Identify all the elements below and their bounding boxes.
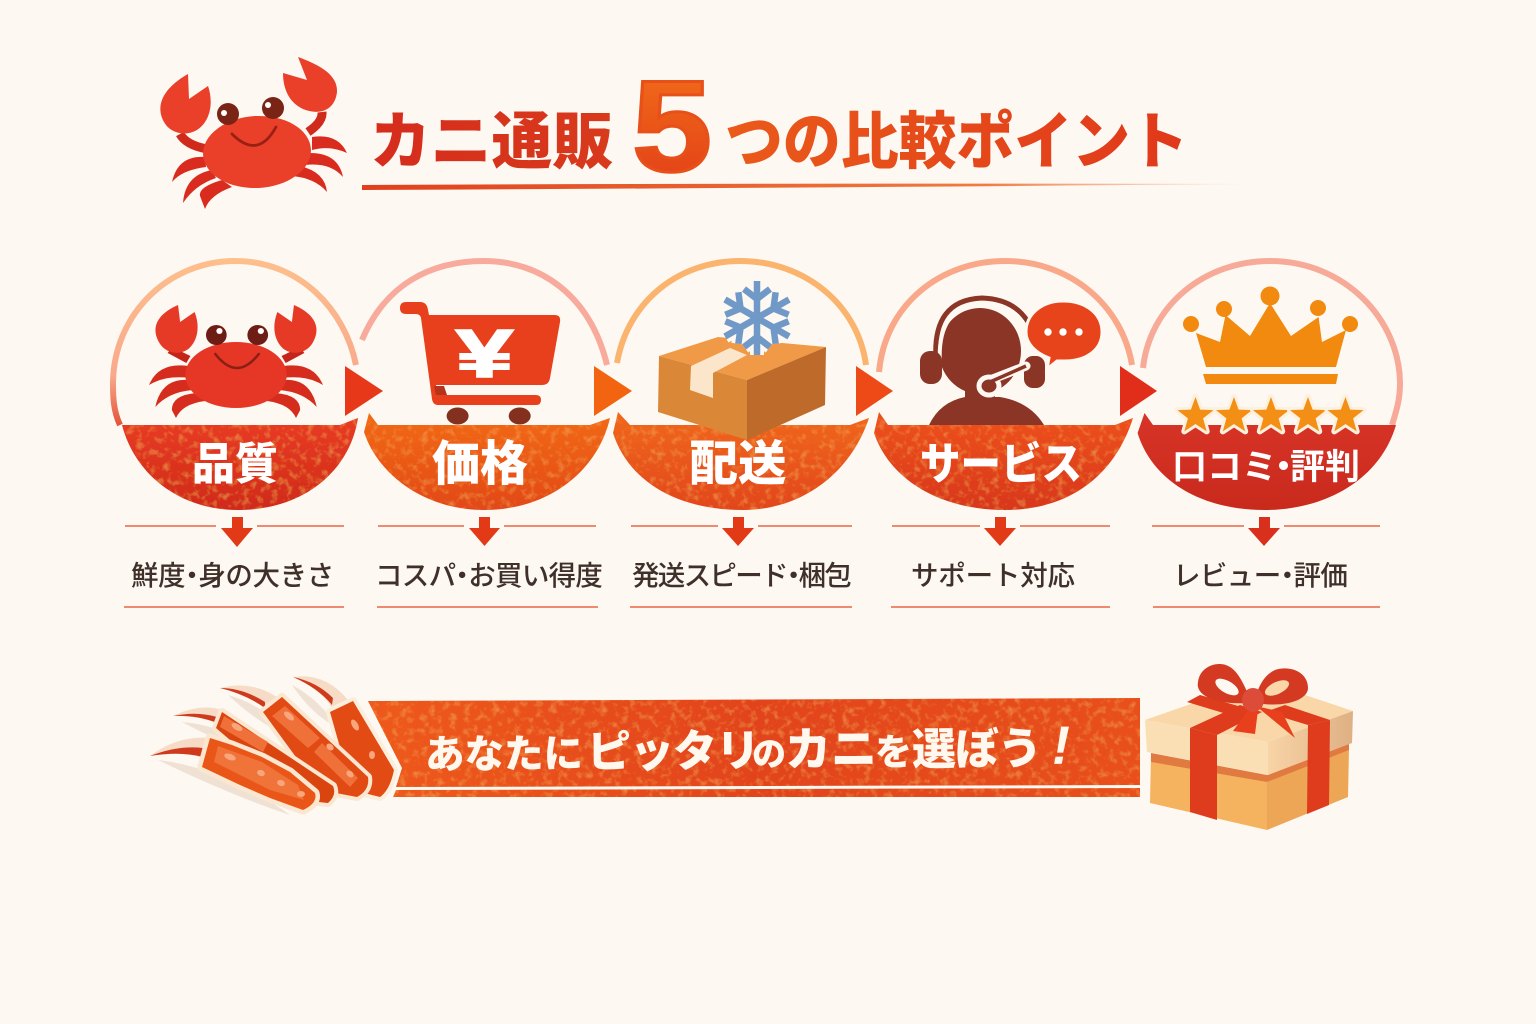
arrow 4 [1120, 366, 1157, 416]
title text: カニ通販 [370, 108, 613, 177]
step 2: price [362, 261, 610, 510]
icon: title crab [160, 57, 347, 209]
band 1 [122, 418, 358, 510]
banner text: の [752, 736, 786, 774]
caption 2: コスパ・お買い得度 [375, 560, 602, 591]
step 4: service [874, 261, 1133, 510]
leg 4 [150, 738, 316, 810]
banner ribbon [368, 698, 1140, 797]
down arrow 1 [221, 517, 253, 547]
title text [370, 53, 1188, 199]
icon: five stars [1178, 397, 1364, 431]
arrow 1 [345, 366, 383, 416]
caption 2 [375, 517, 602, 607]
band 3 [613, 412, 869, 510]
label: delivery: 配送 [690, 438, 786, 491]
box body [1150, 755, 1267, 830]
arrow 2 [594, 366, 632, 416]
icon: shopping cart: ¥ [456, 316, 513, 392]
caption 1 [124, 517, 344, 607]
banner text: 選ぼう [912, 725, 1041, 775]
icon: speech bubble [1026, 301, 1102, 369]
caption 4: サポート対応 [911, 560, 1075, 591]
banner text: ピッタリ [587, 727, 759, 777]
caption 5: レビュー・評価 [1173, 560, 1347, 591]
bottom banner [368, 698, 1140, 797]
caption 4 [891, 517, 1110, 607]
title underline [362, 184, 1250, 190]
banner text: を [875, 732, 912, 773]
leg 3 [173, 708, 334, 803]
caption 3: 発送スピード・梱包 [632, 560, 851, 591]
label: reviews: 口コミ・評判 [1172, 448, 1360, 487]
banner text: カニ [785, 723, 877, 776]
band 4 [874, 412, 1133, 510]
ring 4 [879, 261, 1132, 372]
label: price: 価格 [432, 438, 528, 491]
bow [1198, 664, 1308, 738]
down arrow 4 [984, 517, 1016, 546]
icon: crown [1183, 286, 1358, 384]
label: service: サービス [920, 439, 1082, 489]
step 3: delivery [613, 261, 869, 510]
down arrow 3 [722, 517, 754, 546]
leg 2 [220, 685, 368, 797]
icon: gift box [1145, 664, 1353, 830]
icon: shopping cart [400, 302, 560, 424]
down arrow 2 [469, 517, 500, 546]
icon: crab [149, 305, 323, 418]
ring 2 [362, 261, 607, 365]
step 5: reviews [1138, 261, 1400, 510]
down arrow 5 [1248, 517, 1280, 546]
leg shadows [158, 685, 338, 815]
icon: snowflake [718, 281, 796, 355]
title block [160, 53, 1250, 209]
banner text: あなたに [425, 732, 583, 777]
arrows between steps [345, 366, 1157, 416]
box lid [1145, 690, 1353, 742]
arrow 3 [856, 366, 893, 416]
caption 3 [630, 517, 852, 607]
caption 5 [1152, 517, 1380, 607]
icon: operator with headset [920, 298, 1045, 425]
band 2 [364, 413, 610, 510]
ring 3 [617, 261, 866, 365]
title text: つの比較ポイント [725, 108, 1188, 177]
icon: cardboard box [658, 337, 826, 440]
banner text: ! [1052, 716, 1070, 776]
ring 1 [113, 261, 356, 425]
lid shadow stripe [1151, 743, 1349, 782]
caption 1: 鮮度・身の大きさ [131, 560, 334, 591]
band 5 [1138, 413, 1396, 510]
leg 1 [293, 676, 394, 797]
ring 5 [1143, 261, 1400, 425]
step 1: quality [113, 261, 358, 510]
label: quality: 品質 [192, 440, 278, 489]
title text: 5 [632, 53, 712, 199]
icon: crab legs [150, 676, 394, 815]
ribbon [1187, 695, 1330, 820]
